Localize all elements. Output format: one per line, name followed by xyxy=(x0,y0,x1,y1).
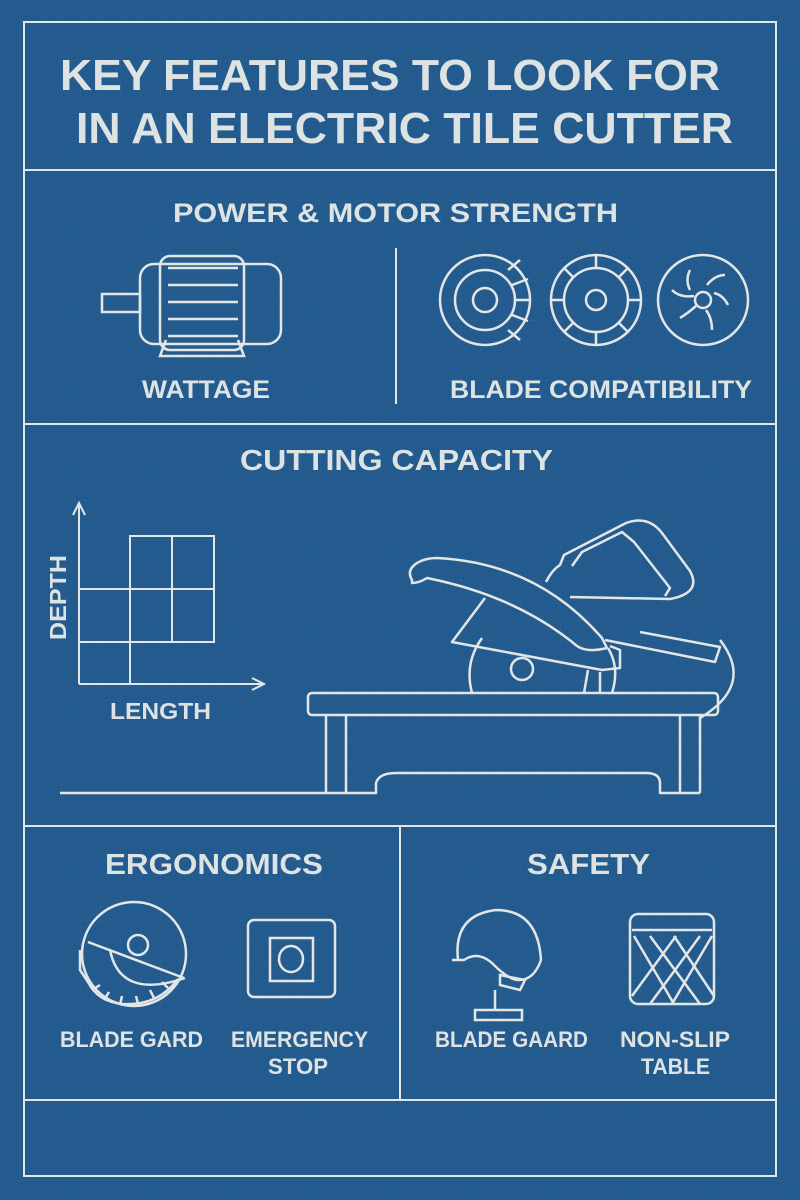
axis labels xyxy=(45,555,211,724)
label: blade gaard: BLADE GAARD xyxy=(435,1027,588,1052)
chart: depth/length grid xyxy=(73,503,264,690)
title: KEY FEATURES TO LOOK FOR xyxy=(60,51,720,100)
icon: blades xyxy=(440,255,748,345)
title xyxy=(60,51,733,153)
heading: power & motor strength: POWER & MOTOR STRENGTH xyxy=(173,198,618,228)
icon: non-slip table xyxy=(630,914,714,1004)
axis labels: DEPTH xyxy=(45,555,71,640)
label: emergency stop xyxy=(231,1027,368,1079)
icon: blade guard xyxy=(80,902,186,1006)
label: non-slip table xyxy=(620,1027,730,1079)
icon: emergency stop xyxy=(248,920,335,997)
title: IN AN ELECTRIC TILE CUTTER xyxy=(76,104,733,153)
label: non-slip table: NON-SLIP xyxy=(620,1027,730,1052)
label: wattage: WATTAGE xyxy=(142,376,270,404)
label: emergency stop: EMERGENCY xyxy=(231,1027,368,1052)
heading: safety: SAFETY xyxy=(527,849,650,881)
icon: blade gaard xyxy=(452,910,541,1020)
heading: cutting capacity: CUTTING CAPACITY xyxy=(240,445,553,477)
axis labels: LENGTH xyxy=(110,698,211,724)
illustration: tile saw xyxy=(60,521,734,793)
label: non-slip table: TABLE xyxy=(641,1054,710,1079)
icon: motor xyxy=(102,256,281,356)
label: blade compatibility: BLADE COMPATIBILITY xyxy=(450,376,752,404)
label: emergency stop: STOP xyxy=(268,1054,328,1079)
label: blade gard: BLADE GARD xyxy=(60,1027,203,1052)
heading: ergonomics: ERGONOMICS xyxy=(105,849,323,881)
